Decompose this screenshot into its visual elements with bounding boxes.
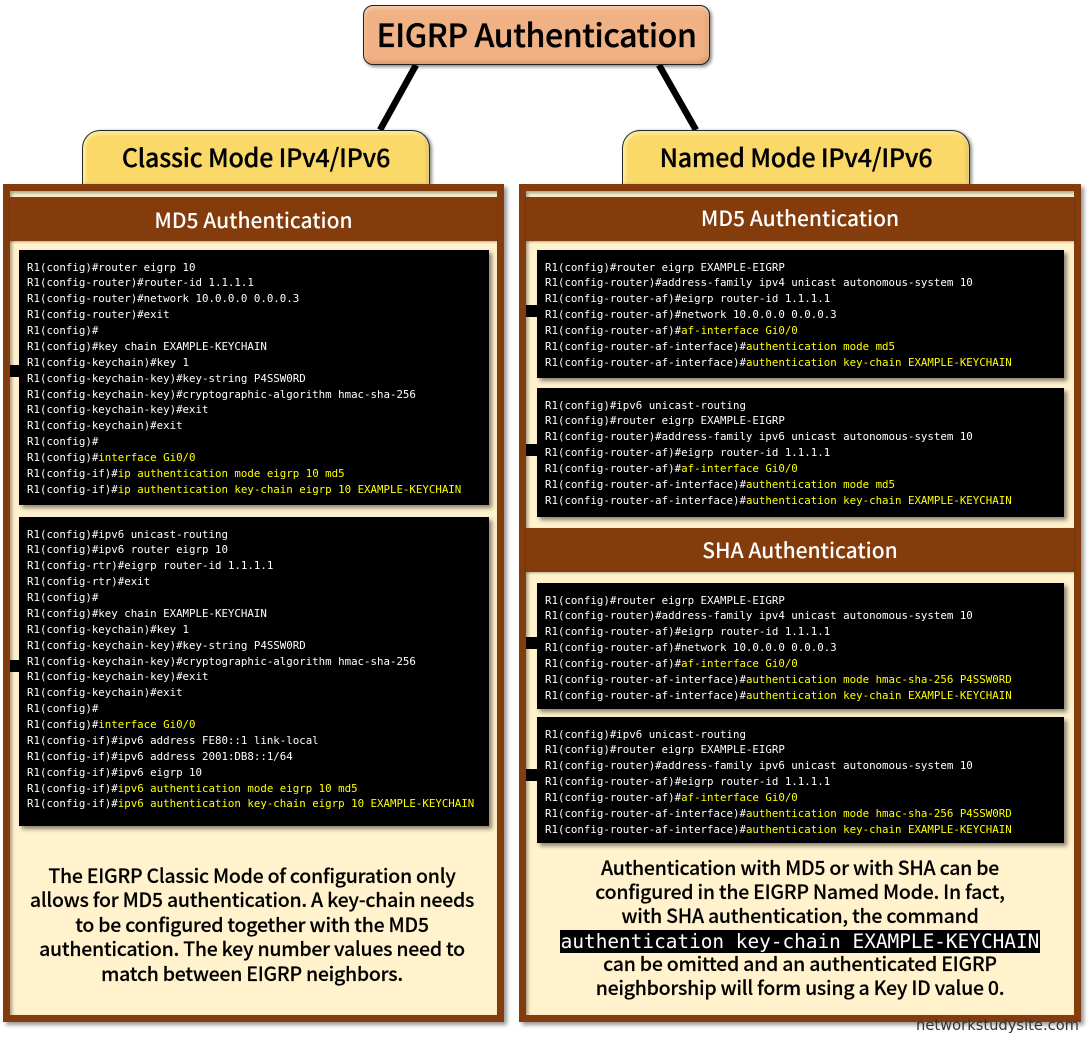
text: named description: authentication key-chain EXAMPLE-KEYCHAIN <box>561 930 1039 953</box>
text: named description <box>560 852 1040 1001</box>
panel: named mode <box>519 184 1081 1022</box>
terminal: named IPv6 SHA: R1(config)#ipv6 unicast-routing R1(config)#router eigrp EXAMPLE-EIGRP R1(config-router)#address-family ipv6 unicast autonomous-system 10 R1(config-router-af)#eigrp router-id 1.1.1.1 R1(config-router-af)#af-interface Gi0/0 R1(config-router-af-interface)#authentication mode hmac-sha-256 P4SSW0RD R1(config-router-af-interface)#authentication key-chain EXAMPLE-KEYCHAIN <box>545 728 1012 836</box>
heading: named MD5 <box>526 197 1074 241</box>
connector tab: classic terminal 2 <box>10 660 20 672</box>
text: classic description: match between EIGRP neighbors. <box>101 958 403 987</box>
terminal: named IPv4 MD5: R1(config)#router eigrp EXAMPLE-EIGRP R1(config-router)#address-family ipv4 unicast autonomous-system 10 R1(config-router-af)#eigrp router-id 1.1.1.1 R1(config-router-af)#network 10.0.0.0 0.0.0.3 R1(config-router-af)#af-interface Gi0/0 R1(config-router-af-interface)#authentication mode md5 R1(config-router-af-interface)#authentication key-chain EXAMPLE-KEYCHAIN <box>545 260 1012 369</box>
text: classic description: allows for MD5 authentication. A key-chain needs <box>30 884 474 913</box>
text: classic description: The EIGRP Classic Mode of configuration only <box>48 860 456 888</box>
connector tab: named terminal 2 <box>526 444 537 456</box>
heading: named SHA <box>526 528 1074 572</box>
tab: classic mode: Classic Mode IPv4/IPv6 <box>122 139 390 175</box>
panel: classic mode <box>3 184 504 1022</box>
title: EIGRP Authentication <box>376 11 697 57</box>
tab: named mode: Named Mode IPv4/IPv6 <box>660 139 932 175</box>
text: named description: with SHA authentication, the command <box>621 900 979 929</box>
text: classic description <box>30 860 474 987</box>
terminal: classic IPv6 MD5: R1(config)#ipv6 unicast-routing R1(config)#ipv6 router eigrp 10 R1(config-rtr)#eigrp router-id 1.1.1.1 R1(config-rtr)#exit R1(config)# R1(config)#key chain EXAMPLE-KEYCHAIN R1(config-keychain)#key 1 R1(config-keychain-key)#key-string P4SSW0RD R1(config-keychain-key)#cryptographic-algorithm hmac-sha-256 R1(config-keychain-key)#exit R1(config-keychain)#exit R1(config)# R1(config)#interface Gi0/0 R1(config-if)#ipv6 address FE80::1 link-local R1(config-if)#ipv6 address 2001:DB8::1/64 R1(config-if)#ipv6 eigrp 10 R1(config-if)#ipv6 authentication mode eigrp 10 md5 R1(config-if)#ipv6 authentication key-chain eigrp 10 EXAMPLE-KEYCHAIN <box>27 528 474 810</box>
terminal: named IPv4 SHA: R1(config)#router eigrp EXAMPLE-EIGRP R1(config-router)#address-family ipv4 unicast autonomous-system 10 R1(config-router-af)#eigrp router-id 1.1.1.1 R1(config-router-af)#network 10.0.0.0 0.0.0.3 R1(config-router-af)#af-interface Gi0/0 R1(config-router-af-interface)#authentication mode hmac-sha-256 P4SSW0RD R1(config-router-af-interface)#authentication key-chain EXAMPLE-KEYCHAIN <box>545 594 1012 702</box>
text: named description: neighborship will form using a Key ID value 0. <box>596 972 1004 1001</box>
terminal: classic IPv4 MD5: R1(config)#router eigrp 10 R1(config-router)#router-id 1.1.1.1 R1(config-router)#network 10.0.0.0 0.0.0.3 R1(config-router)#exit R1(config)# R1(config)#key chain EXAMPLE-KEYCHAIN R1(config-keychain)#key 1 R1(config-keychain-key)#key-string P4SSW0RD R1(config-keychain-key)#cryptographic-algorithm hmac-sha-256 R1(config-keychain-key)#exit R1(config-keychain)#exit R1(config)# R1(config)#interface Gi0/0 R1(config-if)#ip authentication mode eigrp 10 md5 R1(config-if)#ip authentication key-chain eigrp 10 EXAMPLE-KEYCHAIN <box>27 260 461 496</box>
text: named description: configured in the EIGRP Named Mode. In fact, <box>595 876 1005 905</box>
heading: named SHA: SHA Authentication <box>702 535 898 565</box>
text: classic description: to be configured together with the MD5 <box>75 909 429 938</box>
connector tab: named terminal 3 <box>526 637 537 649</box>
heading: classic MD5 <box>10 197 497 241</box>
connector tab: classic terminal 1 <box>10 365 20 377</box>
heading: classic MD5: MD5 Authentication <box>154 205 353 235</box>
tab: classic mode <box>82 130 430 184</box>
connector lines <box>377 65 699 130</box>
watermark: networkstudysite.com <box>916 1017 1079 1034</box>
connector tab: named terminal 1 <box>526 305 537 317</box>
text: named description: can be omitted and an authenticated EIGRP <box>603 948 997 977</box>
tab: named mode <box>622 130 970 184</box>
connector tab: named terminal 4 <box>526 769 537 781</box>
text: classic description: authentication. The key number values need to <box>39 933 465 962</box>
heading: named MD5: MD5 Authentication <box>701 203 899 233</box>
text: named description: Authentication with MD5 or with SHA can be <box>601 852 999 881</box>
terminal: named IPv6 MD5: R1(config)#ipv6 unicast-routing R1(config)#router eigrp EXAMPLE-EIGRP R1(config-router)#address-family ipv6 unicast autonomous-system 10 R1(config-router-af)#eigrp router-id 1.1.1.1 R1(config-router-af)#af-interface Gi0/0 R1(config-router-af-interface)#authentication mode md5 R1(config-router-af-interface)#authentication key-chain EXAMPLE-KEYCHAIN <box>545 398 1012 507</box>
